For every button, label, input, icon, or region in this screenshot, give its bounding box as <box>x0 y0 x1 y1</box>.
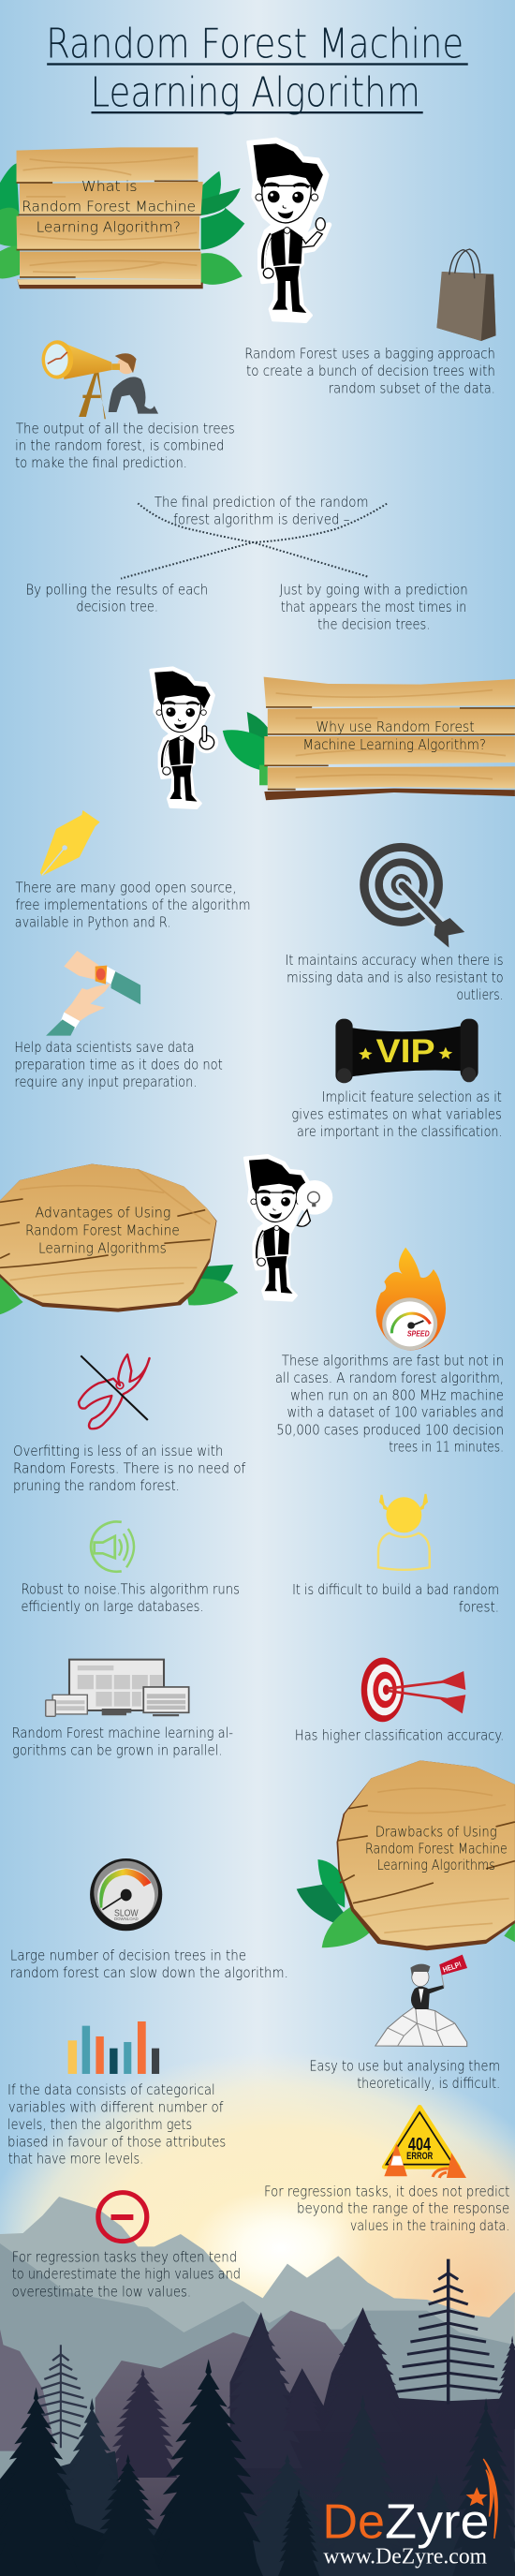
text: overfitting: pruning the random forest. <box>13 1477 180 1494</box>
icon: minus circle <box>98 2193 147 2242</box>
icon: dartboard <box>361 1658 465 1722</box>
title: Learning Algorithm <box>90 69 420 116</box>
text: categorical: variables with different number of <box>8 2099 224 2116</box>
text: output: The output of all the decision trees <box>16 421 235 437</box>
wooden sign: what is <box>0 147 244 289</box>
text: bad forest: forest. <box>459 1599 499 1616</box>
icon: 404 error sign: 404 <box>408 2135 431 2154</box>
icon: help man on paper pile: HELP! <box>442 1961 463 1974</box>
icon: telescope and man <box>42 340 158 419</box>
heading: what is: What is <box>81 178 138 195</box>
heading: what is <box>22 178 196 235</box>
icon: flame speedometer <box>376 1248 446 1351</box>
heading: why use: Machine Learning Algorithm? <box>302 736 486 753</box>
wooden sign: advantages <box>0 1164 238 1314</box>
heading: drawbacks <box>365 1824 508 1873</box>
text: categorical: that have more levels. <box>8 2151 143 2167</box>
text: parallel: Random Forest machine learning al- <box>12 1725 233 1741</box>
logo: DeZyre: Zyre <box>385 2495 490 2549</box>
text: robust <box>21 1581 240 1615</box>
text: output: in the random forest, is combined <box>15 437 225 454</box>
text: slow down: random forest can slow down the algorithm. <box>10 1964 288 1981</box>
text: bad forest <box>292 1581 499 1616</box>
icon: target with arrow <box>364 847 464 948</box>
text: final prediction: forest algorithm is derived – <box>173 511 349 527</box>
text: polling: By polling the results of each <box>25 582 208 598</box>
text: robust: Robust to noise.This algorithm runs <box>21 1581 240 1597</box>
panel: why use random forest <box>14 668 515 1140</box>
text: open source: available in Python and R. <box>15 914 170 930</box>
heading: why use: Why use Random Forest <box>316 718 475 735</box>
heading: what is: Random Forest Machine <box>22 199 196 215</box>
icon: 404 error sign: ERROR <box>406 2151 433 2162</box>
icon: waving character <box>248 139 330 321</box>
icon: devil figure <box>378 1494 430 1570</box>
title <box>46 22 468 116</box>
text: overfitting <box>13 1443 246 1494</box>
logo: DeZyre: De <box>322 2495 385 2549</box>
text: underestimate <box>12 2249 241 2300</box>
text: accuracy: outliers. <box>456 986 504 1003</box>
icon: slow gauge: DOWNLOAD <box>114 1917 139 1922</box>
logo: DeZyre: www.DeZyre.com <box>323 2544 487 2569</box>
heading: advantages: Random Forest Machine <box>25 1222 180 1238</box>
panel: drawbacks <box>7 1760 515 2234</box>
text: save time: require any input preparation. <box>14 1073 197 1090</box>
text: save time: preparation time as it does do not <box>14 1057 223 1073</box>
text: polling: decision tree. <box>76 599 158 615</box>
panel: what is random forest <box>0 139 496 632</box>
text: most times: Just by going with a prediction <box>279 582 468 598</box>
illustration: mountains and forest <box>0 2197 515 2576</box>
icon: flame speedometer: SPEED <box>407 1330 430 1339</box>
icon: VIP scroll: VIP <box>376 1032 435 1070</box>
bar chart <box>68 2021 159 2074</box>
text: categorical <box>7 2081 226 2167</box>
text: open source: free implementations of the algorithm <box>15 896 251 913</box>
heading: what is: Learning Algorithm? <box>37 219 181 235</box>
text: open source: There are many good open source, <box>15 880 237 896</box>
logo: DeZyre <box>322 2459 497 2569</box>
icon: pointing character <box>151 668 218 808</box>
icon: 404 error sign <box>384 2107 466 2178</box>
text: parallel: gorithms can be grown in parallel. <box>12 1742 222 1758</box>
text: save time <box>14 1039 223 1090</box>
text: feature selection <box>291 1088 503 1140</box>
text: output <box>15 421 235 471</box>
icon: devices <box>46 1660 189 1716</box>
text: output: to make the final prediction. <box>15 454 187 471</box>
heading: advantages <box>25 1205 180 1257</box>
text: underestimate: For regression tasks they often tend <box>12 2249 237 2265</box>
text: underestimate: overestimate the low values. <box>12 2284 191 2300</box>
text: slow down: Large number of decision trees in the <box>10 1947 246 1964</box>
icon: pen nib <box>40 810 100 876</box>
icon: hand and watch <box>46 951 140 1036</box>
text: most times: that appears the most times in <box>281 599 466 615</box>
heading: advantages: Learning Algorithms <box>38 1240 167 1257</box>
heading: why use <box>302 718 486 753</box>
wooden sign: drawbacks <box>297 1760 515 1950</box>
panel: advantages <box>0 1155 504 1758</box>
text: categorical: If the data consists of categorical <box>7 2081 215 2098</box>
text: save time: Help data scientists save data <box>14 1039 195 1056</box>
text: open source <box>15 880 251 930</box>
text: most times: the decision trees. <box>317 616 430 632</box>
diagram: dotted crossing lines <box>121 503 387 579</box>
text: accuracy <box>285 952 504 1003</box>
icon: speaker <box>91 1521 134 1572</box>
icon: crossed pruners <box>79 1355 150 1429</box>
text: final prediction: The final prediction of the random <box>154 494 368 511</box>
text: bagging <box>244 346 495 396</box>
text: fast <box>275 1353 504 1456</box>
icon: idea character <box>244 1155 332 1300</box>
icon: VIP scroll <box>335 1019 478 1083</box>
icon: help man on paper pile <box>375 1955 467 2047</box>
heading: advantages: Advantages of Using <box>36 1205 170 1221</box>
wooden sign: why use <box>223 677 515 800</box>
text: slow down <box>10 1947 288 1981</box>
text: parallel <box>12 1725 233 1758</box>
text: regression beyond range <box>264 2184 509 2234</box>
text: categorical: biased in favour of those attributes <box>7 2134 226 2150</box>
text: final prediction <box>154 494 368 527</box>
icon: shopping bag <box>436 249 496 341</box>
text: categorical: levels, then the algorithm gets <box>7 2116 192 2133</box>
text: underestimate: to underestimate the high values and <box>12 2266 241 2283</box>
text: overfitting: Random Forests. There is no need of <box>13 1460 246 1477</box>
text: polling <box>25 582 208 615</box>
text: overfitting: Overfitting is less of an issue with <box>13 1443 223 1459</box>
text: easy to use <box>309 2058 500 2092</box>
icon: slow gauge: SLOW <box>114 1909 139 1919</box>
text: robust: efficiently on large databases. <box>21 1598 203 1615</box>
text: most times <box>279 582 468 632</box>
icon: slow gauge <box>90 1858 162 1931</box>
